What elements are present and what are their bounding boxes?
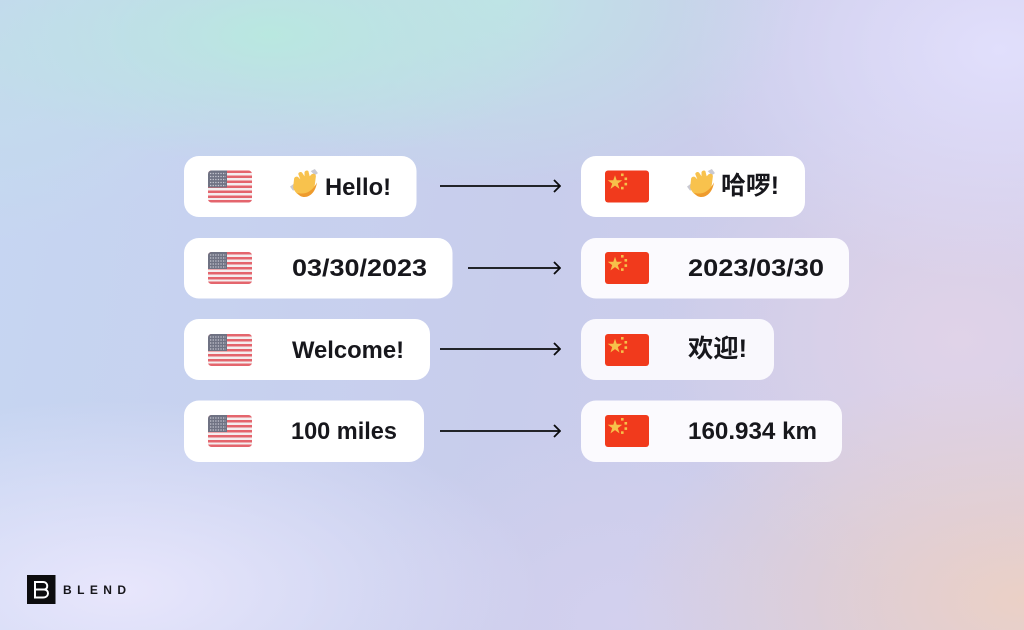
target card: 欢迎	[581, 319, 774, 380]
source card: miles: 100 miles	[291, 418, 397, 445]
row 1: Hello translation	[184, 156, 805, 217]
target card: CN date: 2023/03/30	[688, 255, 824, 282]
row 3: Welcome translation	[184, 319, 774, 380]
infographic canvas	[27, 156, 849, 604]
source card: US date: 03/30/2023	[292, 255, 427, 282]
logo: BLEND	[27, 575, 126, 604]
target card: CN date	[581, 238, 849, 298]
source card: Hello: Hello!	[325, 174, 391, 201]
target card: 哈啰: 哈啰!	[721, 172, 779, 200]
arrow	[440, 348, 560, 350]
target card: km	[581, 400, 842, 462]
arrow	[440, 185, 560, 187]
row 4: unit conversion	[184, 400, 842, 462]
source card: US date	[184, 238, 452, 298]
source card: Hello	[184, 156, 416, 217]
arrow	[468, 267, 560, 269]
source card: Welcome: Welcome!	[292, 337, 404, 364]
target card: km: 160.934 km	[688, 418, 817, 445]
target card: 欢迎: 欢迎!	[688, 335, 747, 363]
source card: miles	[184, 400, 424, 462]
row 2: date format translation	[184, 238, 849, 298]
logo: BLEND: BLEND	[63, 583, 126, 597]
source card: Welcome	[184, 319, 430, 380]
target card: 哈啰	[581, 156, 805, 217]
arrow	[440, 430, 560, 432]
